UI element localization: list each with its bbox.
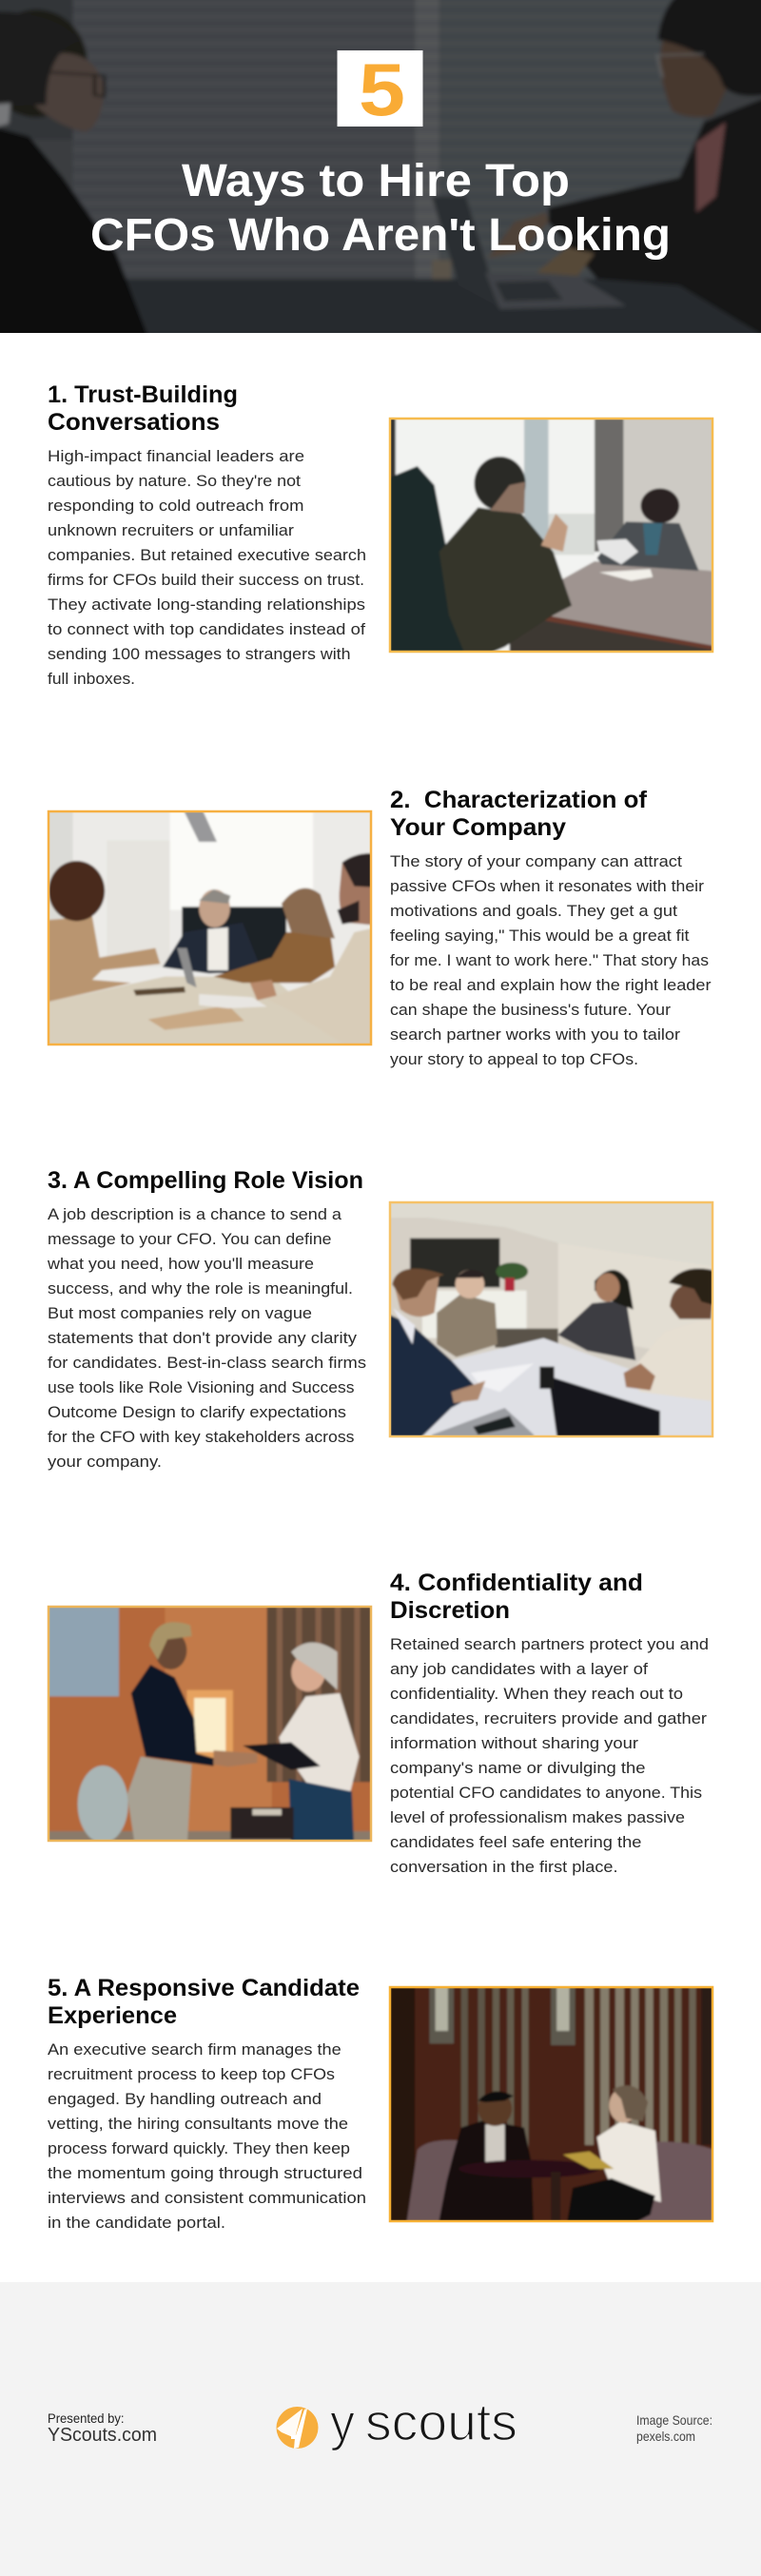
heading 2 xyxy=(390,787,648,841)
photo 2: handshake at a bright office table xyxy=(48,810,373,1046)
title: Ways to Hire Top xyxy=(182,156,570,206)
section 4: confidentiality and discretion xyxy=(34,1570,709,1876)
body text 2: feeling saying," This would be a great fit xyxy=(390,927,690,945)
body text 5: the momentum going through structured xyxy=(48,2165,362,2182)
body text 3: success, and why the role is meaningful. xyxy=(48,1280,353,1298)
body text 4: company's name or divulging the xyxy=(390,1760,645,1777)
body text 3: what you need, how you'll measure xyxy=(47,1256,314,1273)
body text 5: interviews and consistent communication xyxy=(48,2190,366,2207)
image source credit xyxy=(636,2412,712,2444)
photo 3: four colleagues around a white table xyxy=(388,1200,713,1438)
body text 1: cautious by nature. So they're not xyxy=(48,473,301,490)
body text 2 xyxy=(390,853,712,1068)
heading 1: 1. Trust-Building xyxy=(48,381,238,408)
heading 4 xyxy=(390,1570,643,1624)
body text 2: to be real and explain how the right leader xyxy=(390,977,712,994)
body text 1: full inboxes. xyxy=(48,671,135,688)
body text 3: message to your CFO. You can define xyxy=(48,1231,331,1248)
heading 5: Experience xyxy=(48,2002,177,2029)
heading 2: 2. Characterization of xyxy=(390,787,648,813)
heading 3: 3. A Compelling Role Vision xyxy=(48,1167,363,1194)
section 2: characterization of your company xyxy=(34,787,712,1068)
body text 4: any job candidates with a layer of xyxy=(390,1661,648,1678)
number badge: 5 xyxy=(359,48,405,131)
section 5: a responsive candidate experience xyxy=(48,1975,728,2233)
body text 4: candidates feel safe entering the xyxy=(390,1834,641,1851)
logo wordmark: y xyxy=(330,2392,355,2451)
body text 4: information without sharing your xyxy=(390,1735,639,1752)
body text 1: to connect with top candidates instead of xyxy=(48,621,365,638)
body text 2: for me. I want to work here." That story has xyxy=(390,952,709,969)
presented by credit: Presented by: xyxy=(48,2410,124,2426)
body text 2: passive CFOs when it resonates with their xyxy=(390,878,705,895)
body text 3: But most companies rely on vague xyxy=(48,1305,312,1322)
hero banner xyxy=(0,0,761,355)
body text 4: candidates, recruiters provide and gather xyxy=(390,1710,708,1727)
body text 2: motivations and goals. They get a gut xyxy=(390,903,677,920)
body text 3 xyxy=(47,1206,366,1471)
presented by credit: YScouts.com xyxy=(48,2425,157,2446)
photo 1: two men at a meeting table xyxy=(388,417,713,653)
title xyxy=(90,156,671,261)
body text 5: An executive search firm manages the xyxy=(48,2041,341,2059)
body text 1: sending 100 messages to strangers with xyxy=(48,646,350,663)
heading 2: Your Company xyxy=(390,814,566,841)
title: CFOs Who Aren't Looking xyxy=(90,210,671,261)
body text 4 xyxy=(390,1636,709,1876)
image source credit: pexels.com xyxy=(636,2429,695,2444)
heading 5: 5. A Responsive Candidate xyxy=(48,1975,360,2001)
body text 3: statements that don't provide any clarity xyxy=(48,1330,358,1347)
footer xyxy=(0,2282,761,2576)
body text 3: for candidates. Best-in-class search firms xyxy=(48,1355,366,1372)
body text 2: your story to appeal to top CFOs. xyxy=(390,1051,638,1068)
heading 5 xyxy=(48,1975,360,2029)
logo wordmark: scouts xyxy=(365,2392,517,2451)
body text 3: use tools like Role Visioning and Success xyxy=(48,1379,354,1396)
body text 1: companies. But retained executive search xyxy=(48,547,366,564)
body text 5: recruitment process to keep top CFOs xyxy=(48,2066,335,2083)
body text 5 xyxy=(48,2041,366,2232)
heading 4: Discretion xyxy=(390,1597,510,1624)
body text 1: High-impact financial leaders are xyxy=(48,448,304,465)
heading 4: 4. Confidentiality and xyxy=(390,1570,643,1596)
body text 4: level of professionalism makes passive xyxy=(390,1809,685,1826)
heading 1 xyxy=(48,381,238,436)
logo xyxy=(276,2392,517,2451)
body text 2: search partner works with you to tailor xyxy=(390,1026,681,1044)
hero photo: interview scene, darkened xyxy=(0,0,761,355)
heading 1: Conversations xyxy=(48,409,220,436)
body text 5: process forward quickly. They then keep xyxy=(48,2140,350,2157)
photo 5: two people seated at a round table, dark wood wall xyxy=(388,1986,713,2222)
body text 1 xyxy=(48,448,366,688)
section 1: trust-building conversations xyxy=(48,381,728,688)
body text 3: A job description is a chance to send a xyxy=(48,1206,342,1223)
icon: orange circle mark xyxy=(276,2407,318,2449)
body text 1: firms for CFOs build their success on trust. xyxy=(48,572,364,589)
body text 4: conversation in the first place. xyxy=(390,1859,618,1876)
body text 3: Outcome Design to clarify expectations xyxy=(48,1404,346,1421)
number badge xyxy=(337,48,422,131)
body text 1: They activate long-standing relationships xyxy=(48,596,365,614)
body text 2: The story of your company can attract xyxy=(390,853,682,870)
body text 3: your company. xyxy=(48,1454,162,1471)
body text 2: can shape the business's future. Your xyxy=(390,1002,672,1019)
body text 1: responding to cold outreach from xyxy=(48,498,304,515)
section 3: a compelling role vision xyxy=(47,1167,728,1471)
body text 4: confidentiality. When they reach out to xyxy=(390,1686,683,1703)
body text 5: vetting, the hiring consultants move the xyxy=(48,2116,348,2133)
body text 3: for the CFO with key stakeholders across xyxy=(48,1429,354,1446)
presented by credit xyxy=(48,2410,157,2446)
photo 4: two women shaking hands in a warm lounge xyxy=(48,1606,373,1842)
body text 5: engaged. By handling outreach and xyxy=(48,2091,322,2108)
body text 5: in the candidate portal. xyxy=(48,2215,225,2232)
image source credit: Image Source: xyxy=(636,2412,712,2428)
body text 4: Retained search partners protect you and xyxy=(390,1636,709,1653)
body text 4: potential CFO candidates to anyone. This xyxy=(390,1785,702,1802)
body text 1: unknown recruiters or unfamiliar xyxy=(48,522,295,539)
